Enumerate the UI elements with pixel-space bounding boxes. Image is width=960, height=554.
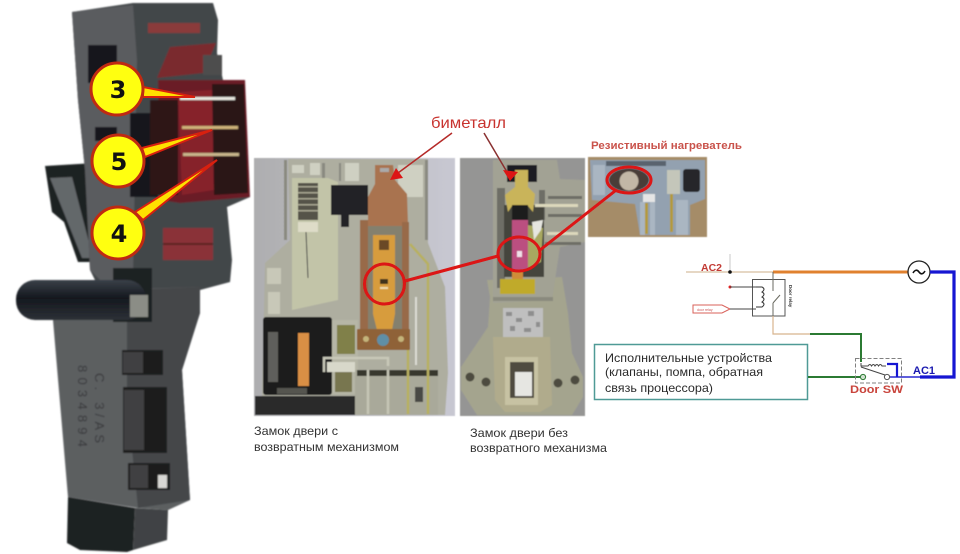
relay input tag: door relay (697, 308, 713, 312)
pink slot (517, 251, 522, 257)
pale column (667, 170, 680, 194)
dark head (512, 205, 528, 221)
door switch dashed box (856, 358, 902, 383)
photo: door lock with return mechanism (254, 158, 455, 416)
relay lower wire (773, 316, 810, 334)
blue thin wire (890, 376, 920, 378)
green wire lower (808, 376, 860, 378)
red slot (148, 23, 200, 33)
latch inner (510, 362, 534, 398)
blue wire (920, 272, 954, 377)
wire hook (324, 358, 388, 372)
AC source (908, 261, 930, 283)
connector dark interior (212, 84, 248, 195)
copper rails (360, 220, 409, 330)
AC1 label: AC1 (913, 365, 935, 377)
callout: terminal 5 (92, 130, 212, 187)
top strip details (292, 163, 423, 197)
copper top plate (368, 165, 408, 229)
terminal pin 4 (183, 153, 239, 156)
switch contact left (860, 374, 866, 380)
relay coil dark housing (263, 317, 332, 395)
red connector line and circles (364, 167, 651, 304)
yellow terminal (500, 279, 535, 294)
caption: lock without return mechanism: Замок двери без (470, 426, 569, 440)
pins (645, 194, 673, 234)
relay box (752, 280, 785, 316)
red lower slot (163, 228, 213, 260)
caption: lock without return mechanism: возвратного механизма (470, 441, 607, 455)
lower windows (122, 350, 170, 490)
connector dark shade left (150, 100, 178, 195)
cylinder end tab (130, 295, 148, 317)
AC2 node (728, 270, 732, 274)
gold plate (505, 170, 535, 212)
orange coil (298, 333, 309, 386)
photo: door lock without return mechanism (460, 158, 585, 416)
AC2 tick (729, 254, 731, 272)
top black cavity (507, 165, 537, 182)
lower plate (461, 277, 583, 415)
light ribs (593, 165, 688, 235)
latch white (515, 372, 532, 396)
AC2 label: AC2 (701, 262, 722, 274)
bottom right panel (355, 370, 438, 415)
callout: terminal 4: 4 (111, 220, 127, 248)
heater cavity (609, 168, 649, 192)
caption: lock with return mechanism: возвратным механизмом (254, 440, 399, 454)
latch block (493, 337, 552, 412)
panel dark top (357, 370, 438, 376)
spring upper (337, 325, 355, 354)
light panel (292, 178, 338, 310)
panel wires (368, 370, 388, 414)
metal plate right of coil (332, 320, 358, 394)
white tab (643, 194, 655, 202)
lower window lights (123, 352, 167, 488)
copper bar (357, 329, 410, 350)
callout: terminal 3 (91, 63, 195, 115)
text box: actuators: связь процессора) (605, 381, 713, 395)
white tab (532, 220, 543, 240)
text box: actuators (594, 344, 808, 400)
moulded part number: 8034894 (75, 365, 90, 447)
door switch coil (861, 363, 886, 366)
terminal pin 5 (182, 126, 238, 129)
heater disc (620, 172, 638, 190)
pink strip (512, 220, 528, 270)
orange foot (512, 270, 523, 282)
upper body (493, 160, 585, 303)
photo: door lock connector part (16, 3, 250, 552)
relay switch (773, 272, 780, 334)
plastic frame (262, 159, 448, 415)
QR label (503, 308, 543, 337)
text box: actuators: (клапаны, помпа, обратная (605, 365, 763, 379)
bottom dark band (255, 396, 356, 415)
coil foot (277, 388, 307, 394)
bottom right foot (133, 508, 168, 550)
plastic body (590, 160, 705, 235)
caption: lock without return mechanism (470, 426, 607, 455)
relay input tag (693, 305, 756, 313)
green wire upper (810, 334, 861, 362)
blue coil wire (887, 364, 897, 377)
heading: resistive heater: Резистивный нагреватель (591, 140, 742, 152)
copper centre strip (373, 235, 395, 330)
screw (377, 334, 389, 346)
spring (298, 183, 318, 278)
callout: terminal 3: 3 (110, 76, 126, 104)
upper windows (88, 45, 158, 197)
lower body right side (127, 287, 200, 508)
left lower squares (267, 268, 281, 314)
mounting holes (466, 372, 580, 388)
small grey latch (203, 55, 222, 75)
side pins (535, 204, 578, 235)
relay label: Door relay (788, 285, 793, 308)
black block (331, 185, 368, 227)
dark block above pin (113, 268, 152, 322)
spring lower (335, 372, 352, 392)
coil silver side (268, 332, 278, 382)
connector shell (158, 80, 250, 203)
body inner dark (497, 188, 582, 288)
housing upper (72, 3, 250, 290)
switch blade (861, 367, 885, 375)
connector red interior (178, 90, 214, 195)
strap (493, 297, 553, 301)
orange wire (773, 270, 908, 274)
inner dark field (504, 205, 544, 277)
brass rails (408, 244, 428, 414)
moulded part number (75, 365, 107, 447)
bar rivets (363, 336, 404, 342)
photo: resistive heater (588, 157, 707, 237)
moulded part number: C. 3/AS (92, 373, 107, 443)
cylinder pin (16, 280, 146, 320)
frame interior (367, 226, 403, 330)
red top block (157, 43, 216, 78)
callout: terminal 5: 5 (111, 148, 127, 176)
copper plate cutout (380, 168, 389, 172)
grey rail (415, 297, 417, 365)
dark rib top (606, 161, 666, 166)
switch contact right (884, 374, 890, 380)
heading: bimetal: биметалл (431, 115, 506, 132)
circuit diagram (686, 254, 954, 396)
Door SW label: Door SW (850, 384, 904, 396)
bottom dark foot (67, 497, 135, 552)
AC2 neutral line (686, 271, 773, 273)
relay control red node (728, 286, 756, 288)
strip slot (379, 240, 389, 289)
caption: lock with return mechanism: Замок двери с (254, 424, 338, 438)
text box: actuators: Исполнительные устройства (605, 351, 772, 365)
olive curved plate (528, 225, 543, 268)
socket (683, 169, 700, 192)
caption: lock with return mechanism (254, 424, 399, 454)
panel dark square (415, 387, 423, 402)
arrow: bimetal to left photo (390, 133, 452, 180)
terminal pin 3 (180, 97, 235, 100)
frame dark ribs (284, 160, 428, 240)
housing left face (72, 5, 137, 280)
arrow: bimetal to right photo (484, 133, 518, 181)
lower body (53, 287, 200, 510)
white disc (327, 362, 355, 372)
side tab (45, 163, 100, 262)
latch window (505, 357, 538, 405)
callout: terminal 4 (92, 160, 217, 259)
relay coil (756, 287, 764, 307)
